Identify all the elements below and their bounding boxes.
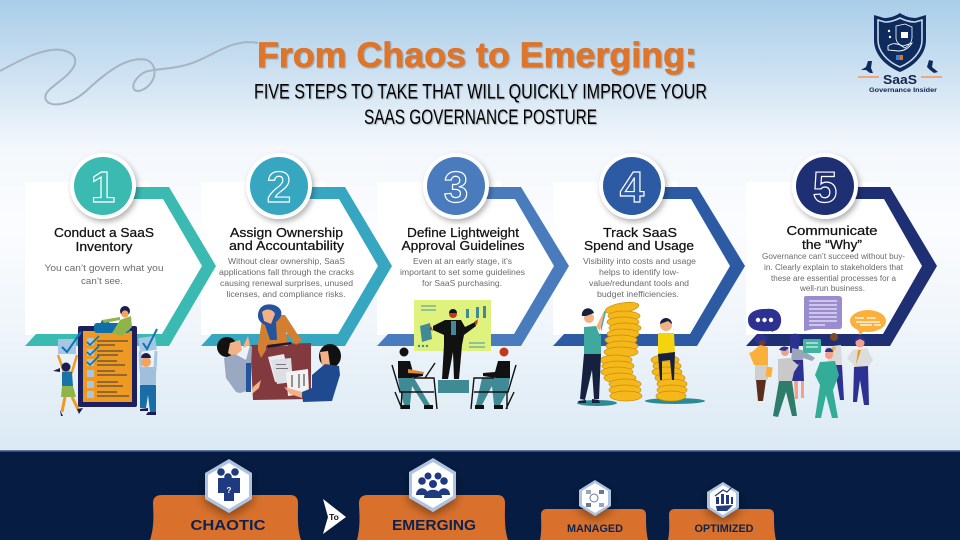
maturity tab: managed: [540, 480, 648, 540]
step 3 body text: [400, 257, 525, 288]
step 5 body text: well-run business.: [799, 284, 865, 293]
right person: [660, 319, 672, 331]
step 1 body text: [44, 263, 164, 286]
step 3 heading: Approval Guidelines: [402, 238, 525, 253]
subtitle: FIVE STEPS TO TAKE THAT WILL QUICKLY IMPROVE YOUR: [254, 80, 707, 104]
right person: [319, 344, 341, 368]
bubble right: [850, 310, 886, 332]
logo: SaaS Governance Insider: SaaS: [883, 72, 917, 87]
step 4 body text: value/redundant tools and: [589, 279, 689, 288]
maturity tab: optimized: [668, 482, 776, 540]
step 2 body text: licenses, and compliance risks.: [226, 290, 346, 299]
logo: SaaS Governance Insider: [858, 13, 942, 94]
right person: [140, 351, 156, 370]
footer band: [0, 450, 960, 540]
title: From Chaos to Emerging:: [257, 36, 697, 75]
arrow: to: To: [329, 512, 339, 522]
illustration: presenter with seated team: [392, 300, 516, 409]
step 1 body text: can’t see.: [81, 276, 123, 286]
panel: step 1: [25, 153, 216, 416]
step 2 body text: causing renewal surprises, unused: [220, 279, 353, 288]
maturity tab: emerging: [357, 458, 508, 540]
step 2 heading: Assign Ownership: [230, 225, 343, 240]
number badge 2: [246, 153, 312, 219]
man right: [856, 338, 864, 348]
step 4 heading: [584, 225, 694, 253]
step 2 heading: and Accountability: [229, 238, 345, 253]
step 5 heading: [786, 223, 878, 252]
step 5 body text: these are essential processes for a: [771, 274, 897, 283]
top person: [258, 315, 302, 358]
number badge 5: 5: [813, 163, 837, 212]
step 2 body text: Without clear ownership, SaaS: [228, 257, 345, 266]
maturity tab: managed: MANAGED: [567, 523, 623, 535]
arrow: to: [323, 499, 346, 534]
step 1 body text: You can’t govern what you: [44, 263, 164, 273]
step 5 heading: Communicate: [786, 223, 878, 238]
maturity tab: optimized: OPTIMIZED: [694, 523, 754, 535]
panel: step 5: [746, 153, 937, 418]
step 5 body text: in. Clearly explain to stakeholders that: [764, 263, 904, 272]
step 3 heading: [402, 225, 525, 253]
center woman: [791, 334, 799, 342]
number badge 1: 1: [91, 163, 115, 212]
left person: [58, 355, 77, 372]
step 4 heading: Spend and Usage: [584, 238, 694, 253]
step 1 heading: Inventory: [76, 239, 133, 254]
illustration: team with checklist: [53, 306, 157, 416]
decorative squiggle line: [0, 42, 258, 104]
man left front: [781, 348, 789, 356]
panel: step 4: [553, 153, 745, 406]
number badge 3: [423, 153, 489, 219]
left person: [584, 313, 594, 323]
step 2 body text: [219, 257, 354, 299]
maturity tab: chaotic: [150, 459, 301, 540]
logo: SaaS Governance Insider: Governance Insider: [869, 87, 938, 94]
step 4 body text: helps to identify low-: [599, 268, 679, 277]
step 3 heading: Define Lightweight: [407, 225, 519, 240]
left seated: [400, 348, 408, 356]
illustration: team discussion with speech bubbles: [748, 296, 886, 418]
illustration: meeting around a table: [217, 304, 341, 402]
chevron 4: [553, 182, 745, 346]
step 1 heading: Conduct a SaaS: [54, 225, 154, 240]
number badge 4: 4: [620, 163, 645, 212]
icon: hexagon with unknown person: [205, 459, 252, 513]
bubble left: [748, 309, 781, 332]
number badge 3: 3: [444, 163, 468, 212]
icon: hexagon with process map: [579, 480, 611, 516]
chevron 3: [377, 182, 569, 346]
woman left: [755, 334, 767, 346]
chevron 2: [201, 182, 392, 346]
man right back: [830, 333, 838, 341]
step 3 body text: important to set some guidelines: [400, 268, 525, 277]
subtitle: SAAS GOVERNANCE POSTURE: [364, 106, 597, 129]
step 4 body text: [583, 257, 697, 299]
chevron 5: [746, 182, 937, 346]
step 4 body text: budget inefficiencies.: [597, 290, 679, 299]
teal note bubble: [803, 339, 821, 353]
panel: step 3: [377, 153, 569, 409]
icon: hexagon with group: [409, 458, 456, 512]
right seated: [500, 348, 508, 356]
subtitle: [254, 80, 707, 129]
chevron 1: [25, 182, 216, 346]
left person: [217, 337, 237, 357]
panel: step 2: [201, 153, 392, 402]
step 1 heading: [54, 225, 154, 254]
step 4 heading: Track SaaS: [603, 225, 677, 240]
step 2 heading: [229, 225, 345, 253]
step 5 body text: Governance can’t succeed without buy-: [762, 252, 905, 261]
maturity tab: emerging: EMERGING: [392, 518, 476, 534]
step 5 heading: the “Why”: [802, 237, 862, 252]
step 5 body text: [762, 252, 905, 293]
illustration: people and coin stacks: [577, 300, 705, 406]
step 3 body text: Even at an early stage, it’s: [413, 257, 512, 266]
icon: hexagon with growth chart: [707, 482, 739, 518]
number badge 2: 2: [267, 163, 291, 212]
icon: hexagon with unknown person: ?: [227, 486, 232, 495]
step 4 body text: Visibility into costs and usage: [583, 257, 697, 266]
maturity tab: chaotic: CHAOTIC: [190, 518, 266, 534]
step 3 body text: for SaaS purchasing.: [422, 279, 502, 288]
man teal: [825, 351, 833, 359]
number badge 4: [599, 153, 665, 219]
number badge 1: [70, 153, 136, 219]
bubble center: [804, 296, 842, 331]
number badge 5: [792, 153, 858, 219]
step 2 body text: applications fall through the cracks: [219, 268, 354, 277]
